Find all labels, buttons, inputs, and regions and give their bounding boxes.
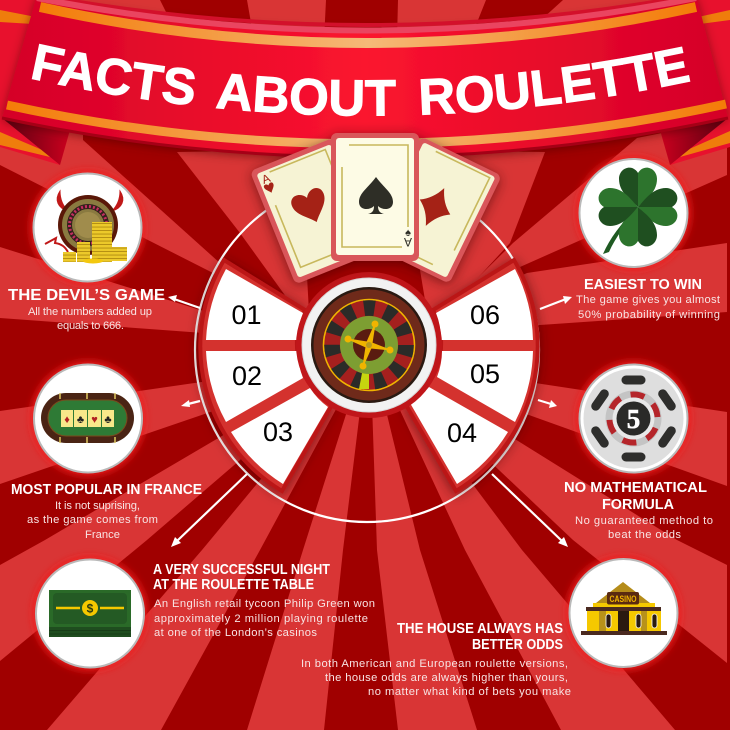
heading: AT THE ROULETTE TABLE: [153, 577, 314, 593]
card: ace of hearts: [250, 138, 379, 284]
panel: most popular in france: [11, 362, 202, 541]
text: the house odds are always higher than yours,: [325, 672, 568, 684]
panel: a very successful night: [33, 556, 375, 670]
heading: A VERY SUCCESSFUL NIGHT: [153, 562, 330, 578]
icon: card table: ♣: [104, 414, 112, 426]
central wheel diagram: [195, 178, 539, 522]
card: ace of diamonds: [368, 136, 502, 284]
sector: 01: [206, 269, 303, 340]
text: 50% probability of winning: [578, 309, 720, 321]
sector: 06: 06: [470, 300, 500, 330]
title ribbon: [0, 0, 730, 165]
heading: THE DEVIL’S GAME: [8, 287, 165, 304]
panel: the devil's game: [8, 170, 165, 332]
card: ace of spades: ♠: [405, 227, 411, 239]
card: ace of hearts: A: [260, 171, 272, 187]
text: beat the odds: [608, 529, 681, 541]
card: ace of spades: A: [404, 235, 412, 249]
icon: casino building: [566, 556, 680, 670]
arrow: 05 to formula: [538, 400, 557, 408]
icon: poker chip: [576, 362, 690, 476]
icon: card table: ♥: [91, 414, 98, 426]
sector: 02: [206, 351, 303, 422]
text: No guaranteed method to: [575, 515, 713, 527]
icon: card table: ♦: [64, 414, 70, 426]
text: at one of the London’s casinos: [154, 627, 317, 639]
text: An English retail tycoon Philip Green won: [154, 598, 375, 610]
heading: EASIEST TO WIN: [584, 277, 702, 293]
icon: four leaf clover: [576, 156, 690, 270]
panel: easiest to win: [576, 156, 721, 321]
text: approximately 2 million playing roulette: [154, 613, 368, 625]
text: It is not suprising,: [55, 500, 140, 512]
sector backing: [200, 260, 538, 491]
arrow: 01 to devil's game: [168, 295, 200, 308]
roulette wheel: [296, 272, 442, 418]
outer white ring: [195, 178, 539, 522]
sector: 05: 05: [470, 359, 500, 389]
heading: FORMULA: [602, 497, 675, 513]
icon: banknotes: $: [87, 602, 94, 616]
ribbon body: [2, 0, 728, 157]
panel: the house always has better odds: [301, 556, 680, 698]
sector: 03: 03: [263, 417, 293, 447]
arrow: 06 to easiest: [540, 296, 572, 309]
heading: NO MATHEMATICAL: [564, 480, 707, 496]
text: no matter what kind of bets you make: [368, 686, 571, 698]
ribbon left tail: [0, 0, 70, 165]
text: In both American and European roulette versions,: [301, 658, 568, 670]
arrow: 04 to house: [492, 474, 568, 547]
card: ace of spades: [331, 133, 419, 261]
text: All the numbers added up: [28, 306, 152, 318]
icon: card table: ♣: [77, 414, 84, 426]
text: France: [85, 529, 120, 541]
sector: 04: [410, 387, 508, 484]
text: equals to 666.: [57, 320, 124, 332]
sector: 02: 02: [232, 361, 262, 391]
icon: card table: [31, 362, 145, 476]
arrow: 03 to night: [171, 474, 247, 547]
title: FACTS ABOUT ROULETTE: [32, 44, 690, 116]
playing cards: [250, 133, 502, 284]
heading: THE HOUSE ALWAYS HAS: [397, 621, 563, 637]
arrow: 02 to france: [181, 400, 200, 407]
panel: no mathematical formula: [564, 362, 713, 541]
heading: MOST POPULAR IN FRANCE: [11, 482, 202, 498]
sector: 04: 04: [447, 418, 477, 448]
text: The game gives you almost: [576, 294, 721, 306]
sector: 01: 01: [231, 300, 262, 330]
icon: casino building: CASINO: [610, 594, 636, 605]
sector: 03: [231, 388, 328, 484]
text: as the game comes from: [27, 514, 158, 526]
sector: 05: [437, 351, 533, 422]
sector: 06: [436, 269, 533, 340]
ribbon right tail: [660, 0, 730, 165]
heading: BETTER ODDS: [472, 637, 563, 653]
icon: devil roulette: [30, 170, 144, 284]
icon: poker chip: 5: [627, 404, 640, 434]
icon: banknotes: [33, 556, 147, 670]
